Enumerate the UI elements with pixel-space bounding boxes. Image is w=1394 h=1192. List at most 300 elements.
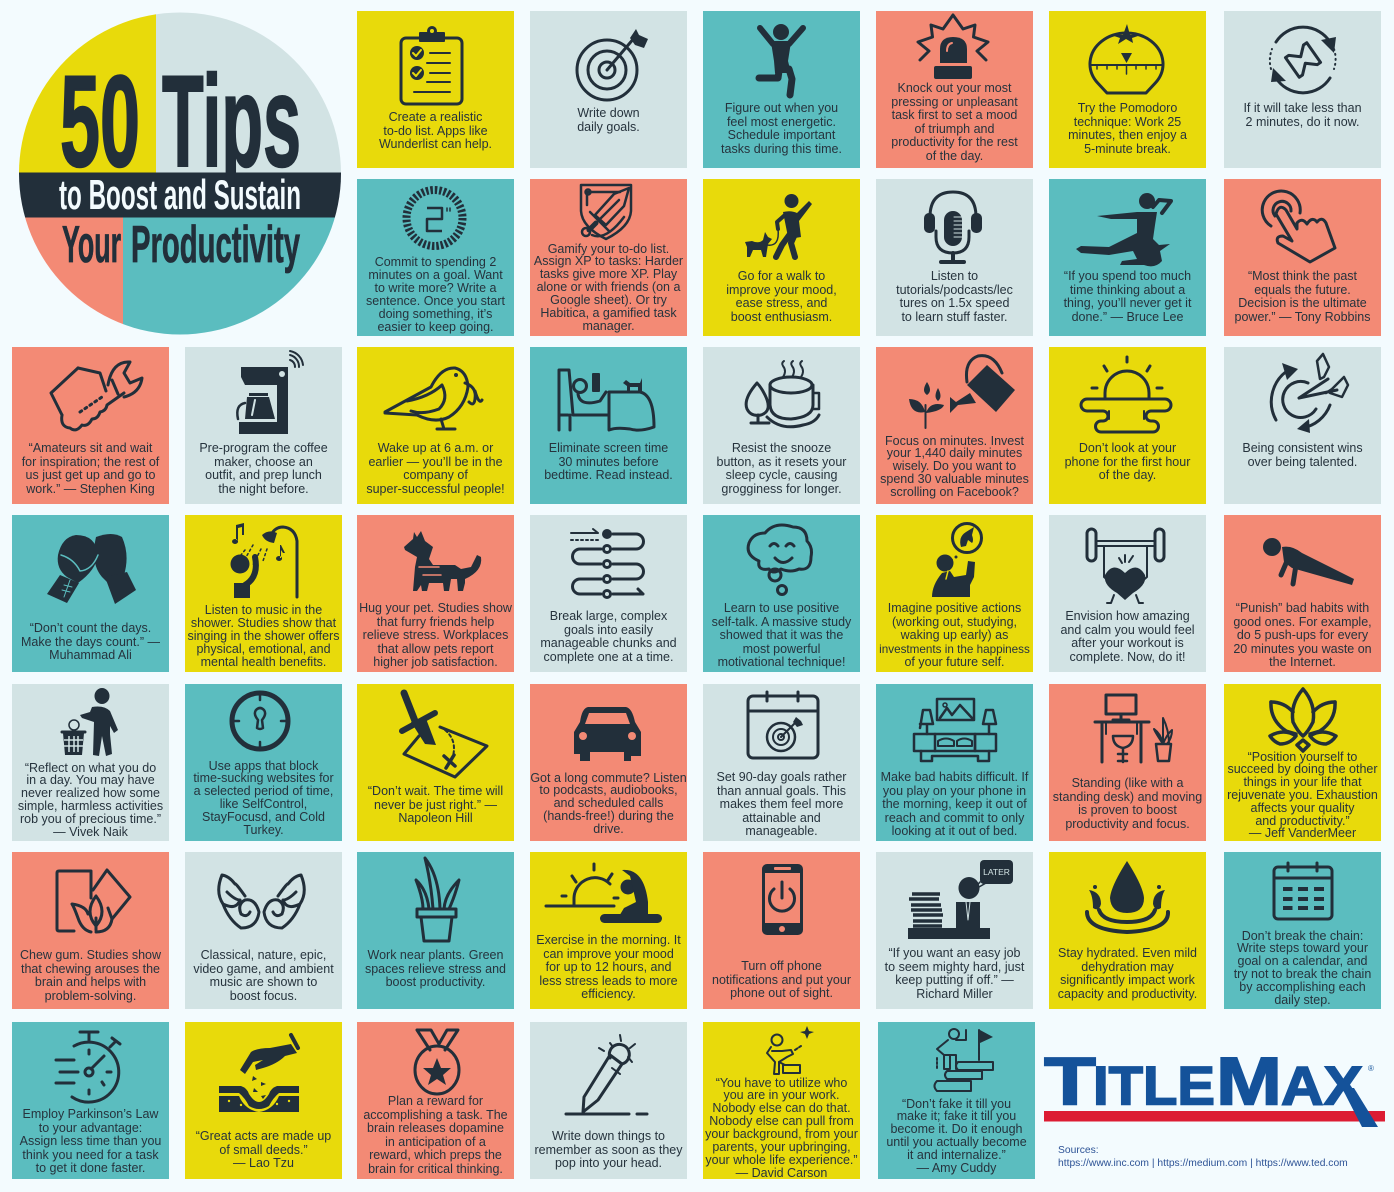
tip text: company of xyxy=(403,468,468,482)
tip text: Make bad habits difficult. If xyxy=(881,770,1028,784)
tip text: sleep cycle, causing xyxy=(726,468,837,482)
tip text xyxy=(1064,269,1192,324)
tip text: us just get up and go to xyxy=(26,468,155,482)
icon: water drop splash xyxy=(1087,861,1168,932)
tip text xyxy=(18,760,163,839)
icon: medal xyxy=(415,1030,459,1094)
tip text: affects your quality xyxy=(1250,801,1354,815)
tip text xyxy=(359,601,512,669)
tip text: Listen to music in the xyxy=(205,602,322,616)
tip text: of your future self. xyxy=(904,655,1005,669)
tip text: Commit to spending 2 xyxy=(375,254,496,268)
tip text: “You have to utilize who xyxy=(716,1076,847,1090)
tip text xyxy=(1242,441,1363,468)
tip text: Try the Pomodoro xyxy=(1078,101,1177,115)
icon: person walking dog xyxy=(745,194,812,257)
tip text: manageable. xyxy=(745,824,818,838)
tip text: shower. Studies show that xyxy=(191,616,336,630)
tip text xyxy=(721,101,842,156)
tip text xyxy=(22,441,160,496)
icon: bedroom xyxy=(914,699,996,761)
icon: microphone and headphones xyxy=(924,192,982,262)
tile: stay hydrated xyxy=(1049,852,1206,1009)
tip text: like SelfControl, xyxy=(220,797,307,811)
tip text: scrolling on Facebook? xyxy=(890,485,1019,499)
tip text: can improve your mood xyxy=(543,946,674,960)
tip text: your background, from your xyxy=(705,1127,858,1141)
tip text: Wunderlist can help. xyxy=(379,137,492,151)
tile: Jeff VanderMeer quote xyxy=(1224,684,1381,841)
icon: car front xyxy=(574,707,641,761)
tip text: Imagine positive actions xyxy=(888,601,1021,615)
heading: 50 Tips xyxy=(60,48,301,194)
tip text xyxy=(717,770,846,838)
icon: flying kick silhouette xyxy=(1076,193,1171,266)
tile: no screens before bed xyxy=(530,347,687,504)
tip text: in a day. You may have xyxy=(26,773,155,787)
tip text: over being talented. xyxy=(1248,454,1357,468)
tip text: 5-minute break. xyxy=(1084,142,1171,156)
tip text: a selected period of time, xyxy=(194,784,333,798)
tip text: simple, harmless activities xyxy=(18,799,163,813)
tile: Muhammad Ali quote xyxy=(12,515,169,672)
tip text xyxy=(540,609,677,664)
tip text: Employ Parkinson’s Law xyxy=(23,1107,158,1121)
tip text: Plan a reward for xyxy=(388,1094,483,1108)
tip text: rejuvenate you. Exhaustion xyxy=(1227,788,1378,802)
tip text: remember as soon as they xyxy=(534,1142,682,1156)
tip text: equals the future. xyxy=(1254,282,1351,296)
tip text: “If you spend too much xyxy=(1064,269,1191,283)
icon: dog being hugged xyxy=(404,531,481,591)
tip text xyxy=(366,441,505,496)
tile: Richard Miller quote xyxy=(876,852,1033,1009)
tip text: mental health benefits. xyxy=(201,654,326,668)
icon: two-second dial xyxy=(406,190,462,246)
tip text: to podcasts, audiobooks, xyxy=(539,783,678,797)
tip text: and calm you would feel xyxy=(1060,622,1195,636)
tip text: than annual goals. This xyxy=(717,784,846,798)
tip text: Write down things to xyxy=(552,1129,665,1143)
tip text: succeed by doing the other xyxy=(1227,762,1378,776)
tip text: Richard Miller xyxy=(916,986,993,1000)
tip text: by accomplishing each xyxy=(1239,980,1366,994)
tile: two-minute rule xyxy=(1224,11,1381,168)
tip text xyxy=(188,602,339,668)
tip text: Being consistent wins xyxy=(1242,441,1363,455)
icon: procrastinating worker with speech bubble: LATER xyxy=(983,867,1010,877)
tip text: Turkey. xyxy=(243,823,284,837)
tip text: Muhammad Ali xyxy=(49,648,132,662)
tip text: Learn to use positive xyxy=(724,601,839,615)
icon: planting seeds xyxy=(219,1035,299,1112)
icon: person doing push-up xyxy=(1263,538,1354,585)
tip text: manager. xyxy=(582,319,635,333)
tip text: 2 minutes, do it now. xyxy=(1246,114,1359,128)
tip text: Schedule important xyxy=(728,128,835,142)
tip text: StayFocusd, and Cold xyxy=(202,810,325,824)
icon: arrows hitting target xyxy=(1271,354,1348,433)
tip text: after your workout is xyxy=(1071,636,1184,650)
tip text xyxy=(1065,441,1190,482)
tip text: capacity and productivity. xyxy=(1058,986,1197,1000)
tile: Amy Cuddy quote xyxy=(878,1022,1035,1179)
tip text: motivational technique! xyxy=(718,655,845,669)
tip text xyxy=(577,106,640,134)
tip text: task first to set a mood xyxy=(892,108,1017,122)
tip text: Assign less time than you xyxy=(20,1134,161,1148)
tip text: it and internalize.” xyxy=(907,1148,1006,1162)
tip text: pressing or unpleasant xyxy=(891,94,1018,108)
tip text: daily goals. xyxy=(577,120,640,134)
logo: TitleMax: AX xyxy=(1281,1054,1363,1116)
sources xyxy=(1058,1144,1348,1170)
tip text xyxy=(881,770,1028,838)
tile: Tony Robbins quote xyxy=(1224,179,1381,336)
tip text: feel most energetic. xyxy=(727,114,836,128)
tip text: tasks during this time. xyxy=(721,142,842,156)
tile: Bruce Lee quote xyxy=(1049,179,1206,336)
tip text: to get it done faster. xyxy=(36,1161,145,1175)
tip text xyxy=(526,1130,691,1170)
icon: coffee cup and egg xyxy=(746,361,819,427)
icon: sword and shield xyxy=(581,185,631,239)
tip text: dehydration may xyxy=(1081,960,1174,974)
tip text: singing in the shower offers xyxy=(188,628,339,642)
tip text xyxy=(193,948,334,1002)
tip text: brain and helps with xyxy=(35,975,146,989)
tip text: outfit, and prep lunch xyxy=(205,468,322,482)
icon: person singing in the shower xyxy=(230,523,297,598)
tile: music for focus xyxy=(185,852,342,1009)
tip text: of triumph and xyxy=(915,122,994,136)
tip text: Make the days count.” — xyxy=(21,634,160,648)
heading: Your Productivity xyxy=(62,216,300,274)
tip text: for up to 12 hours, and xyxy=(546,960,671,974)
tip text: “Amateurs sit and wait xyxy=(29,441,152,455)
tile: resist the snooze xyxy=(703,347,860,504)
tip text xyxy=(1045,947,1210,1001)
tip text: accomplishing a task. The xyxy=(363,1108,508,1122)
heading: Your Productivity: Your xyxy=(62,216,121,274)
icon: touching finger xyxy=(1262,191,1335,262)
tile: podcast speed xyxy=(876,179,1033,336)
tip text: rob you of precious time.” xyxy=(20,812,161,826)
tile: music in the shower xyxy=(185,515,342,672)
tip text: your 1,440 daily minutes xyxy=(887,446,1022,460)
logo: TitleMax: ITLE xyxy=(1093,1054,1215,1116)
tile: morning exercise xyxy=(530,852,687,1009)
tip text: productivity for the rest xyxy=(891,135,1018,149)
icon: procrastinating worker with speech bubble xyxy=(908,860,1013,939)
tip text xyxy=(181,1130,346,1170)
icon: heart lifting barbell xyxy=(1087,529,1164,603)
tip text: button, as it resets your xyxy=(717,454,846,468)
icon: tomato timer xyxy=(1090,24,1163,93)
tip text: Create a realistic xyxy=(389,110,482,124)
tile: focus on minutes xyxy=(876,347,1033,504)
tip text: tutorials/podcasts/lec xyxy=(896,282,1013,296)
title badge xyxy=(19,12,341,334)
tip text: 20 minutes you waste on xyxy=(1233,642,1372,656)
tip text: Chew gum. Studies show xyxy=(20,948,161,962)
icon: target with arrow xyxy=(577,29,648,100)
tip text: make it; fake it till you xyxy=(897,1109,1016,1123)
icon: calendar xyxy=(1274,863,1332,919)
tip text xyxy=(880,434,1029,499)
tip text: of the day. xyxy=(1099,468,1156,482)
tile: consistency xyxy=(1224,347,1381,504)
tip text: — Vivek Naik xyxy=(53,825,128,839)
tip text xyxy=(726,269,837,324)
tip text: significantly impact work xyxy=(1060,973,1195,987)
tile: no phone first hour xyxy=(1049,347,1206,504)
tip text xyxy=(534,242,683,333)
tip text: most powerful xyxy=(743,642,820,656)
tip text: good ones. For example, xyxy=(1233,614,1372,628)
tile: long commute xyxy=(530,684,687,841)
tip text: Use apps that block xyxy=(209,758,318,772)
logo: TitleMax: ® xyxy=(1368,1064,1374,1073)
tip text: work.” — Stephen King xyxy=(26,482,155,496)
icon: pencil with light bulb xyxy=(566,1035,647,1114)
tip text xyxy=(1220,930,1385,1007)
tip text: in anticipation of a xyxy=(385,1134,486,1148)
tip text: the Internet. xyxy=(1269,655,1336,669)
tip text: music are shown to xyxy=(210,975,317,989)
tile: block websites xyxy=(185,684,342,841)
tip text: you play on your phone in xyxy=(883,784,1026,798)
tip text: Stay hydrated. Even mild xyxy=(1058,946,1197,960)
tip text: Knock out your most xyxy=(898,81,1011,95)
tip text: reward, which preps the xyxy=(369,1148,502,1162)
tip text: Work near plants. Green xyxy=(368,948,503,962)
tip text xyxy=(712,601,852,669)
tip text: Standing (like with a xyxy=(1072,776,1183,790)
tip text xyxy=(1053,776,1202,830)
tip text xyxy=(1227,750,1378,840)
tip text: Assign XP to tasks: Harder xyxy=(534,254,683,268)
tip text xyxy=(1235,269,1370,324)
tip text: Set 90-day goals rather xyxy=(717,770,846,784)
tip text: Envision how amazing xyxy=(1065,609,1190,623)
tip text: complete. Now, do it! xyxy=(1069,650,1186,664)
tip text: to write more? Write a xyxy=(374,280,497,294)
icon: clipboard xyxy=(401,26,462,104)
tip text: of the day. xyxy=(926,148,983,162)
tip text xyxy=(874,1098,1039,1174)
tip text xyxy=(879,601,1030,669)
tip text: spaces relieve stress and xyxy=(365,962,506,976)
tip text xyxy=(368,784,503,825)
tip text: 30 minutes before xyxy=(558,454,659,468)
tile: prep the night before xyxy=(185,347,342,504)
tile: wake up early xyxy=(357,347,514,504)
tip text: phone out of sight. xyxy=(730,986,833,1000)
tip text: Exercise in the morning. It xyxy=(536,933,681,947)
tip text: until you actually become xyxy=(886,1135,1027,1149)
tile: David Carson quote xyxy=(703,1022,860,1179)
tile: imagine positive actions xyxy=(876,515,1033,672)
tip text: wisely. Do you want to xyxy=(893,459,1016,473)
tip text: less stress leads to more xyxy=(539,974,678,988)
tip text: looking at it out of bed. xyxy=(892,824,1017,838)
tip text xyxy=(1068,101,1187,156)
icon: sword in a map xyxy=(402,693,487,777)
tile: work near plants xyxy=(357,852,514,1009)
tile: envision post-workout calm xyxy=(1049,515,1206,672)
tile: pressing task xyxy=(876,11,1033,168)
tip text: become it. Do it enough xyxy=(890,1122,1023,1136)
tip text xyxy=(193,758,334,837)
tip text: to-do list. Apps like xyxy=(383,124,488,138)
tip text: “Punish” bad habits with xyxy=(1236,601,1369,615)
tile: Napoleon Hill quote xyxy=(357,684,514,841)
logo: TitleMax: M xyxy=(1216,1045,1282,1120)
logo: TitleMax xyxy=(1040,1045,1394,1140)
icon: stopwatch xyxy=(56,1032,120,1102)
tip text: things in your life that xyxy=(1243,775,1362,789)
tip text: higher job satisfaction. xyxy=(373,655,498,669)
tip text: thing, you’ll never get it xyxy=(1064,296,1191,310)
tip text: “Position yourself to xyxy=(1248,750,1357,764)
tip text: brain for critical thinking. xyxy=(368,1162,503,1176)
tip text xyxy=(699,1076,864,1180)
tip text: to seem mighty hard, just xyxy=(885,960,1024,974)
tip text xyxy=(872,947,1037,1001)
tip text: sentence. Once you start xyxy=(366,294,505,308)
tip text: makes them feel more xyxy=(720,797,843,811)
tip text: Figure out when you xyxy=(725,101,838,115)
tip text: to learn stuff faster. xyxy=(901,310,1008,324)
tip text: done.” — Bruce Lee xyxy=(1072,310,1183,324)
tip text: Turn off phone xyxy=(741,959,822,973)
tile: go for a walk xyxy=(703,179,860,336)
icon: fist holding wrench xyxy=(51,362,142,430)
icon: gum pack and leaf xyxy=(57,870,130,932)
icon: sunrise over water xyxy=(1081,357,1171,432)
tip text: the night before. xyxy=(218,482,309,496)
tip text: do 5 push-ups for every xyxy=(1237,628,1368,642)
tip text: Wake up at 6 a.m. or xyxy=(378,441,493,455)
tile: hug your pet xyxy=(357,515,514,672)
icon: jumping person xyxy=(759,24,803,95)
tip text: Break large, complex xyxy=(550,609,667,623)
sources: https://www.inc.com | https://medium.com | https://www.ted.com xyxy=(1058,1158,1348,1169)
tip text: problem-solving. xyxy=(45,988,136,1002)
tip text: drive. xyxy=(593,822,624,836)
tip text: waking up early) as xyxy=(901,628,1008,642)
tip text: technique: Work 25 xyxy=(1074,114,1181,128)
tip text: “Don’t fake it till you xyxy=(902,1097,1011,1111)
tip text: super-successful people! xyxy=(366,482,505,496)
tip text: Don’t look at your xyxy=(1079,441,1176,455)
tip text: efficiency. xyxy=(581,987,636,1001)
tip text: time thinking about a xyxy=(1070,282,1185,296)
tip text: brain releases dopamine xyxy=(367,1121,504,1135)
tile: realistic to-do list xyxy=(357,11,514,168)
tip text: is proven to boost xyxy=(1078,803,1177,817)
icon: calendar with target xyxy=(748,692,818,758)
tip text: — Lao Tzu xyxy=(233,1156,294,1170)
tip text: — Amy Cuddy xyxy=(917,1161,996,1175)
tip text: never be just right.” — xyxy=(374,798,497,812)
tip text: “Don’t count the days. xyxy=(30,621,151,635)
tip text xyxy=(896,269,1013,324)
tip text: and scheduled calls xyxy=(554,796,663,810)
tip text: physical, emotional, and xyxy=(196,642,331,656)
icon: potted plant xyxy=(416,858,459,941)
tip text: try not to break the chain xyxy=(1234,967,1371,981)
icon: keyhole compass xyxy=(232,693,288,749)
tip text xyxy=(699,960,864,1000)
tip text: attainable and xyxy=(742,810,821,824)
tip text: reach and commit to only xyxy=(885,810,1024,824)
tip text: alone or with friends (on a xyxy=(537,280,680,294)
tip text: for inspiration; the rest of xyxy=(22,454,159,468)
tip text: boost focus. xyxy=(230,988,297,1002)
icon: reading in bed xyxy=(559,370,654,430)
tip text xyxy=(20,948,161,1002)
tip text: phone for the first hour xyxy=(1065,454,1190,468)
tip text: think you need for a task xyxy=(22,1148,159,1162)
tip text xyxy=(199,441,328,496)
tip text: — David Carson xyxy=(736,1166,827,1180)
tile: standing desk xyxy=(1049,684,1206,841)
tip text: “Reflect on what you do xyxy=(25,760,156,774)
tip text xyxy=(365,948,506,989)
tip text xyxy=(536,933,681,1001)
tip text: Gamify your to-do list. xyxy=(548,242,669,256)
tip text: Classical, nature, epic, xyxy=(201,948,326,962)
tip text: video game, and ambient xyxy=(193,962,334,976)
tip text: Napoleon Hill xyxy=(398,811,473,825)
tip text xyxy=(530,770,687,836)
tip text: boost productivity. xyxy=(386,975,485,989)
tile: 90-day goals xyxy=(703,684,860,841)
tip text: Listen to xyxy=(931,269,978,283)
tip text: If it will take less than xyxy=(1243,101,1362,115)
tip text: Nobody else can pull from xyxy=(709,1114,854,1128)
tile: don't break the chain xyxy=(1224,852,1381,1009)
tip text: investments in the happiness xyxy=(879,642,1030,656)
tip text xyxy=(379,110,492,151)
tip text: earlier — you’ll be in the xyxy=(368,454,503,468)
tip text: and productivity.” xyxy=(1255,814,1350,828)
icon: watering can and sprout xyxy=(909,356,1015,428)
icon: sunrise and yoga xyxy=(546,864,662,923)
tip text: power.” — Tony Robbins xyxy=(1235,310,1370,324)
tip text: tures on 1.5x speed xyxy=(900,296,1009,310)
tip text xyxy=(21,621,160,662)
tip text: Hug your pet. Studies show xyxy=(359,601,512,615)
tip text xyxy=(8,1108,173,1176)
tip text: that chewing arouses the xyxy=(21,962,160,976)
icon: coffee maker with wifi xyxy=(237,351,303,434)
tile: Parkinson's Law xyxy=(12,1022,169,1179)
tip text: goals into easily xyxy=(564,622,653,636)
tip text: Decision is the ultimate xyxy=(1238,296,1367,310)
tip text: keep putting if off.” — xyxy=(895,973,1014,987)
tip text: productivity and focus. xyxy=(1065,816,1190,830)
tile: break large goals xyxy=(530,515,687,672)
tip text: spend 30 valuable minutes xyxy=(880,472,1029,486)
tip text: maker, choose an xyxy=(214,454,313,468)
tip text xyxy=(1060,609,1195,664)
icon: bird with worm xyxy=(385,368,482,429)
tip text: notifications and put your xyxy=(712,972,851,986)
tile: write things down xyxy=(530,1022,687,1179)
